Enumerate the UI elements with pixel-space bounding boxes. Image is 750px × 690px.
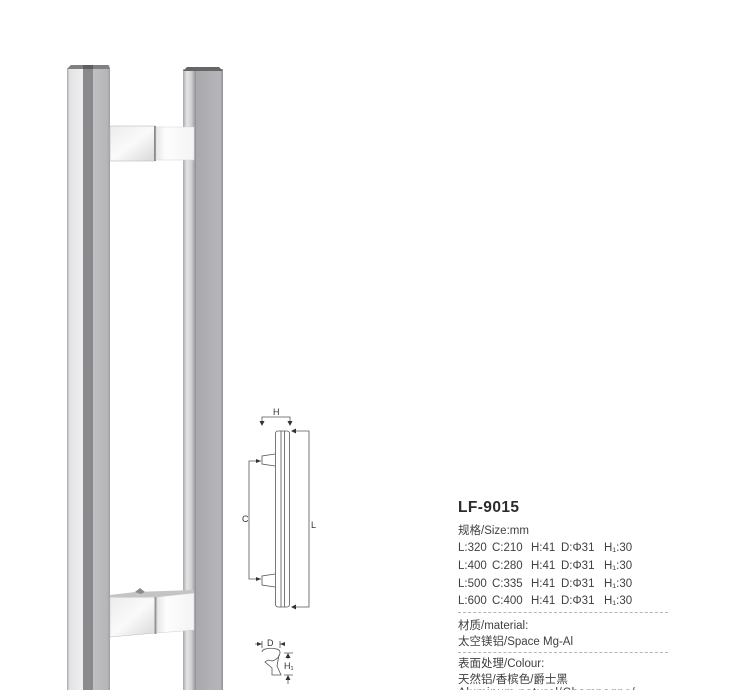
dimension labels: L bbox=[311, 520, 316, 530]
row 500: H₁:30 bbox=[604, 578, 632, 590]
colour text: 天然铝/香槟色/爵士黑 bbox=[458, 674, 568, 686]
row 500: D:Φ31 bbox=[561, 578, 594, 590]
material text bbox=[458, 619, 573, 648]
material text: 材质/material: bbox=[458, 620, 528, 632]
size table bbox=[458, 542, 632, 607]
row 600: H:41 bbox=[531, 595, 555, 607]
technical drawing: side elevation bbox=[249, 417, 309, 610]
row 500: H:41 bbox=[531, 578, 555, 590]
row 320: C:210 bbox=[492, 542, 523, 554]
row 600: C:400 bbox=[492, 595, 523, 607]
dimension labels bbox=[242, 407, 316, 671]
left bar bbox=[67, 65, 110, 690]
row 600 bbox=[458, 595, 632, 607]
bottom bracket bbox=[110, 588, 194, 637]
technical drawing: cross section bbox=[255, 641, 293, 684]
row 600: L:600 bbox=[458, 595, 487, 607]
dimension labels: H₁ bbox=[284, 661, 294, 671]
row 400: D:Φ31 bbox=[561, 560, 594, 572]
row 320: H:41 bbox=[531, 542, 555, 554]
row 400 bbox=[458, 560, 632, 572]
row 320: H₁:30 bbox=[604, 542, 632, 554]
row 320 bbox=[458, 542, 632, 554]
row 500: C:335 bbox=[492, 578, 523, 590]
dimension labels: D bbox=[267, 638, 274, 648]
row 600: H₁:30 bbox=[604, 595, 632, 607]
row 500: L:500 bbox=[458, 578, 487, 590]
row 320: L:320 bbox=[458, 542, 487, 554]
dimension labels: C bbox=[242, 514, 249, 524]
material text: 太空镁铝/Space Mg-Al bbox=[458, 636, 573, 648]
dimension labels: H bbox=[273, 407, 280, 417]
top bracket bbox=[110, 126, 194, 161]
row 600: D:Φ31 bbox=[561, 595, 594, 607]
colour text: 表面处理/Colour: bbox=[458, 658, 544, 670]
colour text bbox=[458, 657, 568, 686]
row 400: H₁:30 bbox=[604, 560, 632, 572]
right bar bbox=[183, 67, 223, 690]
row 320: D:Φ31 bbox=[561, 542, 594, 554]
row 400: H:41 bbox=[531, 560, 555, 572]
row 400: C:280 bbox=[492, 560, 523, 572]
model title: LF-9015 bbox=[458, 499, 519, 516]
row 500 bbox=[458, 578, 632, 590]
row 400: L:400 bbox=[458, 560, 487, 572]
size heading: 规格/Size:mm bbox=[458, 525, 529, 537]
